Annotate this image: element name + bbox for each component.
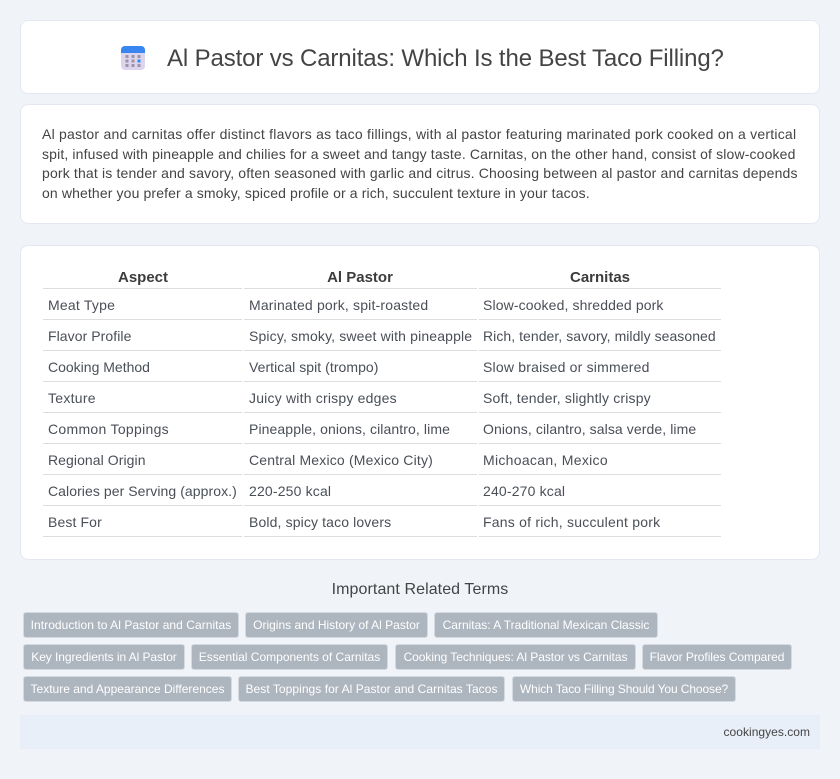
row: flavor profile: Spicy, smoky, sweet with pineapple (249, 328, 472, 344)
row: cooking method: Slow braised or simmered (483, 359, 650, 375)
row: best for (48, 514, 660, 530)
tag row 1 (23, 612, 658, 638)
row: regional origin: Michoacan, Mexico (483, 452, 608, 468)
row: cooking method: Cooking Method (48, 359, 150, 375)
tag row 2: Flavor Profiles Compared (650, 650, 784, 664)
icon: calendar (121, 46, 145, 70)
row: meat type: Slow-cooked, shredded pork (483, 297, 664, 313)
row: regional origin: Central Mexico (Mexico City) (249, 452, 433, 468)
tag row 3: Best Toppings for Al Pastor and Carnitas Tacos (246, 682, 498, 696)
footer bar (20, 715, 820, 749)
tag row 3 (23, 676, 736, 702)
row: flavor profile: Flavor Profile (48, 328, 131, 344)
title: Al Pastor vs Carnitas: Which Is the Best Taco Filling? (167, 45, 724, 72)
tag row 1: Origins and History of Al Pastor (253, 618, 420, 632)
table header: Al Pastor (327, 269, 393, 286)
table header (118, 269, 630, 286)
row: flavor profile (48, 328, 716, 344)
row: flavor profile: Rich, tender, savory, mildly seasoned (483, 328, 716, 344)
row: meat type: Meat Type (48, 297, 115, 313)
row: common toppings: Onions, cilantro, salsa verde, lime (483, 421, 696, 437)
row: calories (48, 483, 565, 499)
row: best for: Fans of rich, succulent pork (483, 514, 660, 530)
row: regional origin (48, 452, 608, 468)
row: common toppings: Pineapple, onions, cilantro, lime (249, 421, 450, 437)
row: texture: Soft, tender, slightly crispy (483, 390, 651, 406)
tag row 2: Essential Components of Carnitas (199, 650, 380, 664)
intro text: pork that is tender and savory, often seasoned with garlic and citrus. Choosing between al pastor and carnitas depends (42, 165, 798, 181)
row: best for: Best For (48, 514, 102, 530)
intro text: spit, infused with pineapple and chilies for a sweet and tangy taste. Carnitas, on the other hand, consist of slow-cooked (42, 146, 796, 162)
intro text: Al pastor and carnitas offer distinct flavors as taco fillings, with al pastor featuring marinated pork cooked on a vertical (42, 126, 796, 142)
row: cooking method (48, 359, 650, 375)
related term tags (23, 612, 792, 702)
table header: Aspect (118, 269, 168, 286)
row: calories: 240-270 kcal (483, 483, 565, 499)
row: cooking method: Vertical spit (trompo) (249, 359, 378, 375)
header card (20, 20, 820, 94)
tag row 2: Cooking Techniques: Al Pastor vs Carnitas (404, 650, 627, 664)
intro text: on whether you prefer a smoky, spiced profile or a rich, succulent texture in your tacos. (42, 185, 590, 201)
row: common toppings: Common Toppings (48, 421, 169, 437)
intro panel (20, 104, 820, 224)
row: texture: Texture (48, 390, 96, 406)
tag row 1: Introduction to Al Pastor and Carnitas (31, 618, 231, 632)
footer source: cookingyes.com (724, 725, 810, 739)
tag row 2 (23, 644, 792, 670)
tag row 2: Key Ingredients in Al Pastor (31, 650, 177, 664)
row: calories: Calories per Serving (approx.) (48, 483, 237, 499)
comparison table panel (20, 245, 820, 560)
row: meat type: Marinated pork, spit-roasted (249, 297, 428, 313)
intro text (42, 126, 798, 201)
row: meat type (48, 297, 664, 313)
row: regional origin: Regional Origin (48, 452, 146, 468)
tag row 3: Which Taco Filling Should You Choose? (520, 682, 728, 696)
row: best for: Bold, spicy taco lovers (249, 514, 391, 530)
tag row 3: Texture and Appearance Differences (31, 682, 224, 696)
tag row 1: Carnitas: A Traditional Mexican Classic (443, 618, 649, 632)
row: texture: Juicy with crispy edges (249, 390, 397, 406)
table header: Carnitas (570, 269, 630, 286)
row: calories: 220-250 kcal (249, 483, 331, 499)
row: common toppings (48, 421, 696, 437)
related terms heading: Important Related Terms (332, 581, 508, 598)
row: texture (48, 390, 651, 406)
